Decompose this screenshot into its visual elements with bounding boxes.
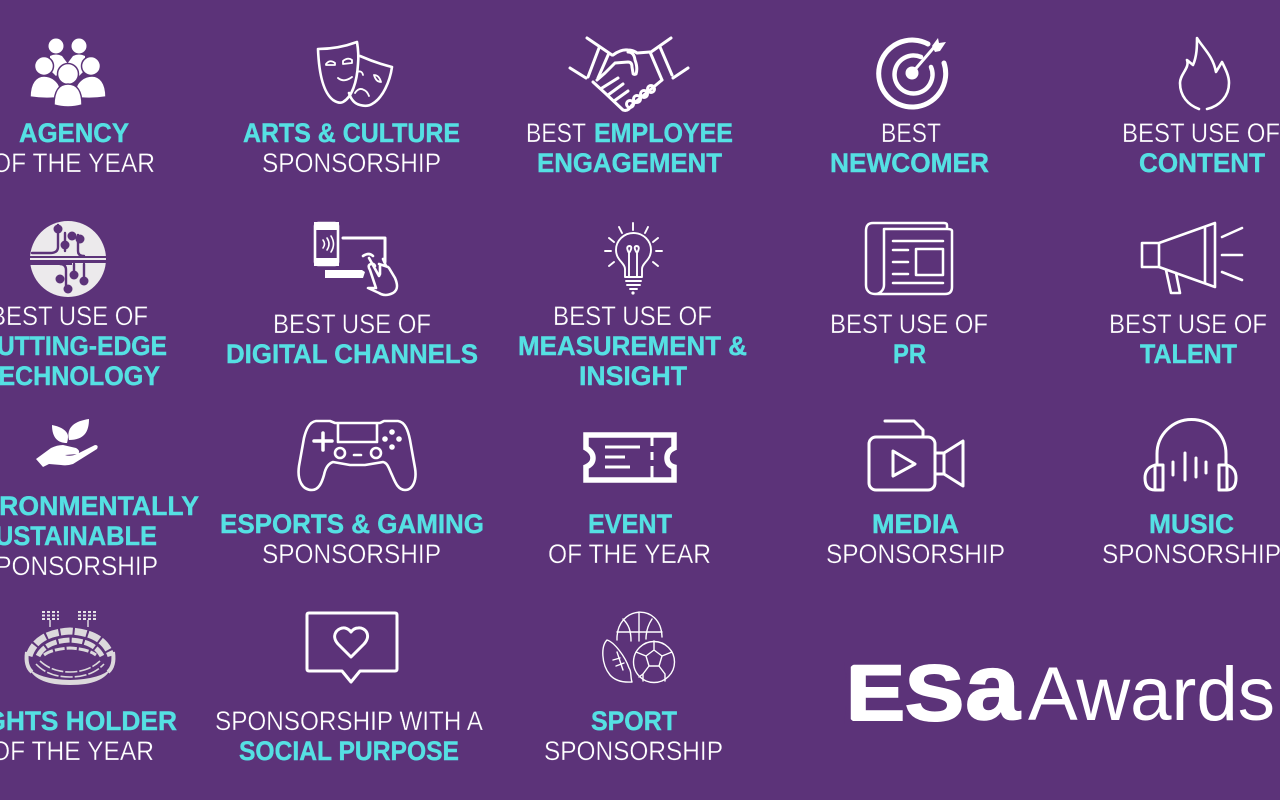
label (0, 491, 199, 581)
label (0, 301, 167, 391)
category: Arts & Culture Sponsorship (243, 42, 460, 178)
category: Esports & Gaming Sponsorship (220, 421, 484, 569)
label (215, 706, 483, 766)
category: Best Use of Measurement & Insight (518, 223, 747, 391)
label: MUSIC (1149, 509, 1234, 539)
label (220, 509, 484, 569)
category: Sponsorship with a Social Purpose (215, 613, 483, 766)
icon: game controller (299, 421, 416, 490)
icon: stadium (27, 612, 113, 685)
label: PR (893, 339, 926, 369)
category: Agency of the Year (0, 38, 155, 178)
label: CONTENT (1139, 148, 1265, 178)
icon: headphones (1145, 420, 1236, 490)
icon: speech bubble with heart (307, 613, 397, 682)
label (0, 706, 177, 766)
icon: handshake (570, 38, 688, 110)
label: BEST (526, 118, 586, 148)
label: SPONSORSHIP WITH A (215, 706, 483, 736)
category: Best Use of Cutting-Edge Technology (0, 221, 167, 391)
label: NEWCOMER (830, 148, 989, 178)
label: INSIGHT (579, 361, 687, 391)
icon: megaphone (1142, 223, 1242, 293)
label (830, 118, 989, 178)
icon: flame (1180, 38, 1229, 109)
icon: target with arrow (879, 38, 946, 107)
icon: newspaper (866, 223, 952, 294)
icon: circuit globe (28, 221, 108, 297)
label: SPORT (591, 706, 677, 736)
category: Best Use of Digital Channels (226, 222, 478, 369)
category: Event of the Year (548, 435, 711, 569)
label: BEST USE OF (1109, 309, 1267, 339)
icon: sports balls (603, 612, 674, 682)
logo: ESA Awards (844, 634, 1275, 739)
label: BEST (881, 118, 941, 148)
label: TALENT (1140, 339, 1237, 369)
icon: theatre masks (318, 42, 392, 106)
category: Media Sponsorship (826, 421, 1005, 569)
icon: hand holding plant (36, 419, 98, 467)
label (826, 509, 1005, 569)
icon: video camera (869, 421, 963, 490)
label (1102, 509, 1280, 569)
label: ARTS & CULTURE (243, 118, 460, 148)
label: SPONSORSHIP (826, 539, 1005, 569)
label: SOCIAL PURPOSE (239, 736, 459, 766)
label (544, 706, 723, 766)
category: Best Use of PR (830, 223, 988, 369)
label: ENGAGEMENT (537, 148, 722, 178)
label (0, 118, 155, 178)
label (243, 118, 460, 178)
icon: ticket (586, 435, 674, 480)
label (548, 509, 711, 569)
category: Best Use of Talent (1109, 223, 1267, 369)
category: Best Newcomer (830, 38, 989, 178)
label (518, 301, 747, 391)
label: ESPORTS & GAMING (220, 509, 484, 539)
icon: light bulb (605, 223, 662, 295)
label: BEST USE OF (273, 309, 431, 339)
label (830, 309, 988, 369)
label (1122, 118, 1280, 178)
label: AGENCY (19, 118, 129, 148)
logo: ESA Awards: ES (846, 648, 964, 737)
category: Sport Sponsorship (544, 612, 723, 766)
label: BEST USE OF (830, 309, 988, 339)
label (226, 309, 478, 369)
label (1109, 309, 1267, 369)
icon: phone and tablet with hand (314, 222, 397, 295)
label: DIGITAL CHANNELS (226, 339, 478, 369)
label: OF THE YEAR (548, 539, 711, 569)
logo: ESA Awards: Awards (1028, 652, 1275, 737)
category: Rights Holder of the Year (0, 612, 177, 766)
label: SPONSORSHIP (262, 148, 441, 178)
label: MEASUREMENT & (518, 331, 747, 361)
label: BEST USE OF (553, 301, 712, 331)
category: Environmentally Sustainable Sponsorship (0, 419, 199, 581)
label (526, 118, 733, 178)
category: Best Use of Content (1122, 38, 1280, 178)
label: MEDIA (872, 509, 959, 539)
label: SPONSORSHIP (262, 539, 441, 569)
logo: ESA Awards: a (965, 634, 1021, 739)
label: SPONSORSHIP (544, 736, 723, 766)
category: Music Sponsorship (1102, 420, 1280, 569)
category: Best Employee Engagement (526, 38, 733, 178)
label: EVENT (588, 509, 672, 539)
icon: group of people (30, 38, 106, 107)
label: EMPLOYEE (594, 118, 733, 148)
